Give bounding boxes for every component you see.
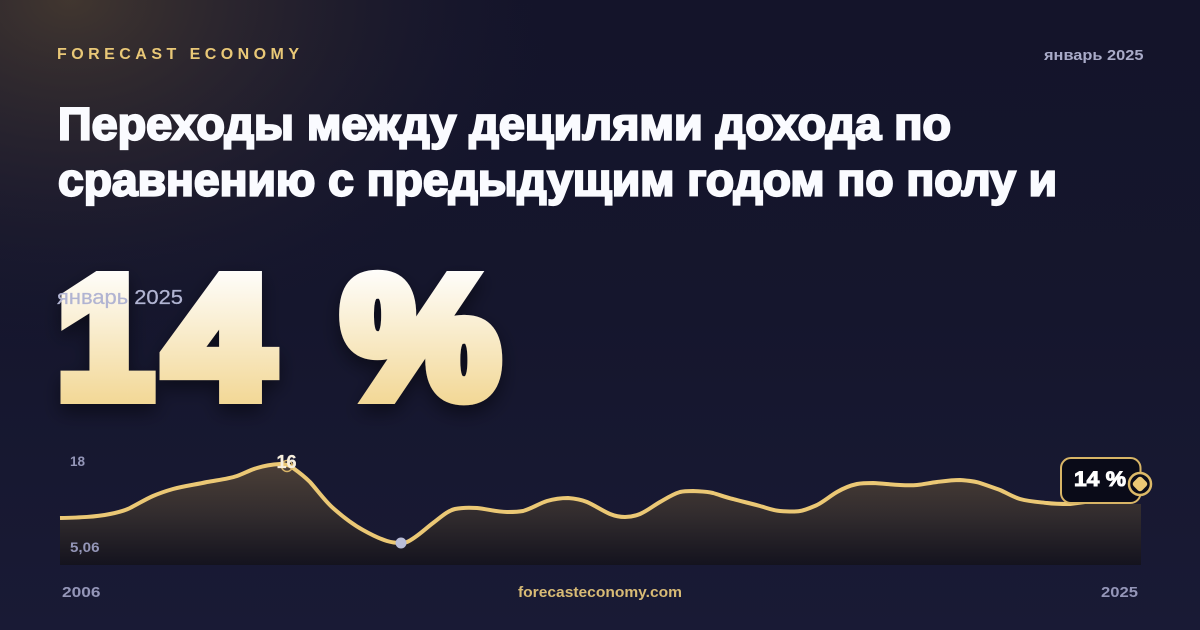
chart area fill [60,464,1141,565]
title [58,98,1057,206]
source site: forecasteconomy.com [518,585,682,601]
big number: % [343,242,499,432]
brand label: FORECAST ECONOMY [57,46,299,63]
end point marker [1129,473,1151,495]
big number: 4 [166,243,271,433]
value callout [1061,458,1140,503]
date top right: январь 2025 [1044,48,1144,64]
value callout: 14 % [1074,468,1126,491]
date overlay on big number: январь 2025 [57,287,183,309]
peak marker [282,460,292,472]
peak value: 16 [276,452,297,472]
minimum marker [396,538,406,548]
axis label: max: 18 [70,454,86,469]
title: сравнению с предыдущим годом по полу и [58,154,1057,206]
title: Переходы между децилями дохода по [58,98,951,150]
big number [58,242,499,433]
chart line [60,464,1100,543]
x axis start year: 2006 [62,585,100,601]
x axis end year: 2025 [1101,585,1138,601]
axis label: min: 5,06 [70,540,100,555]
line chart [60,452,1151,565]
big number: 1 [58,243,152,433]
